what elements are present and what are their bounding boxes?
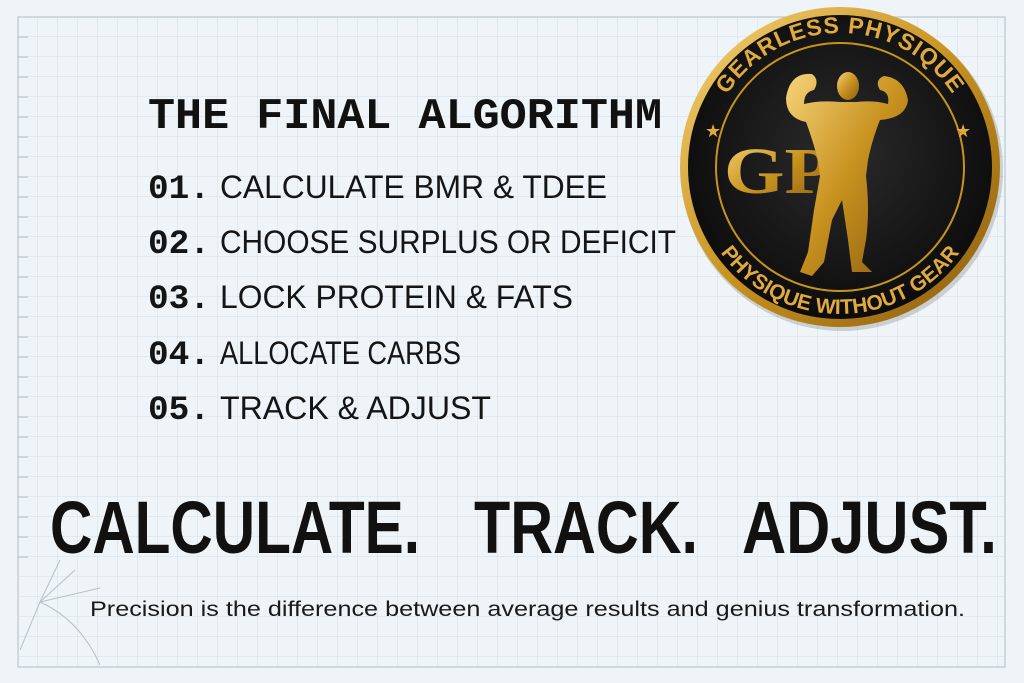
steps list <box>148 169 676 430</box>
step 05: 05. <box>148 392 210 430</box>
step 04: 04. <box>148 337 210 375</box>
step 03: 03. <box>148 281 210 319</box>
step 04 <box>148 335 461 375</box>
headline: CALCULATE. <box>50 486 420 569</box>
step 05: TRACK & ADJUST <box>220 390 491 426</box>
badge bottom text: PHYSIQUE WITHOUT GEAR <box>721 244 960 314</box>
badge: Gearless Physique <box>680 7 1003 331</box>
headline: TRACK. <box>474 486 698 569</box>
GP monogram: GP <box>724 135 832 208</box>
badge: Gearless Physique: ★ <box>955 121 971 142</box>
step 02: CHOOSE SURPLUS OR DEFICIT <box>220 224 676 260</box>
tagline: Precision is the difference between average results and genius transformation. <box>90 598 965 621</box>
step 01: CALCULATE BMR & TDEE <box>220 169 607 205</box>
headline <box>50 486 997 569</box>
bodybuilder figure <box>786 72 908 276</box>
step 04: ALLOCATE CARBS <box>220 335 461 371</box>
step 02: 02. <box>148 226 210 264</box>
title: THE FINAL ALGORITHM <box>148 92 662 142</box>
badge top text: GEARLESS PHYSIQUE <box>717 17 965 94</box>
step 01: 01. <box>148 171 210 209</box>
stars: ★ <box>705 121 721 142</box>
step 03: LOCK PROTEIN & FATS <box>220 279 573 315</box>
